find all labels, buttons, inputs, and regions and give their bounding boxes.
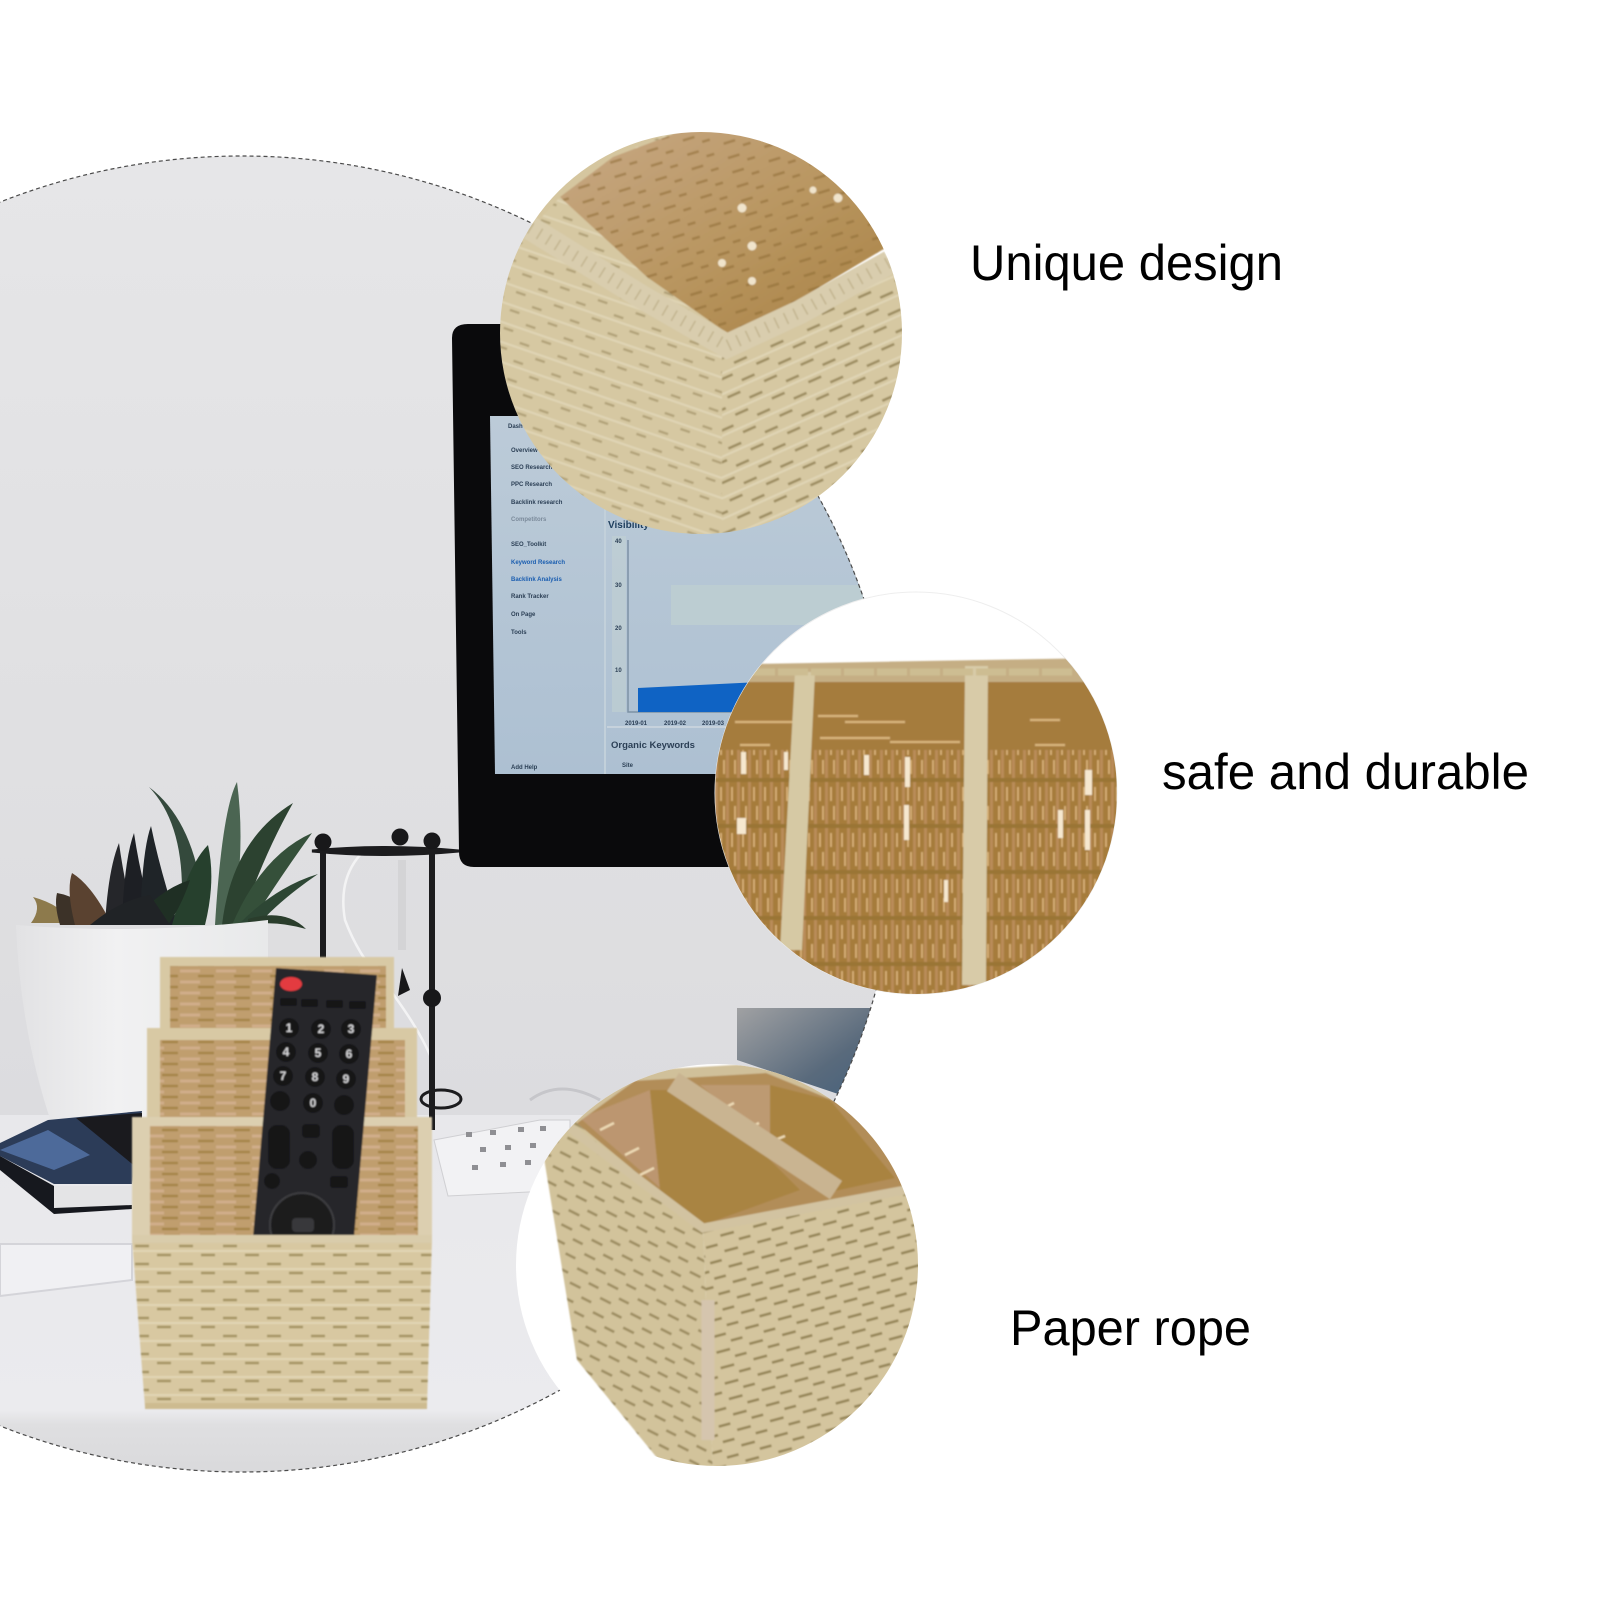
screen text: Keyword Research (511, 560, 565, 566)
paper sheets (0, 1244, 132, 1296)
white pot (34, 920, 268, 1115)
remote d-pad (270, 1193, 334, 1257)
remote control: 4 (283, 1045, 290, 1059)
front compartment (132, 1117, 432, 1241)
screen text: Backlink research (511, 500, 563, 506)
background wall (0, 150, 905, 1475)
infographic canvas (0, 132, 1527, 1473)
remote control: 2 (318, 1022, 325, 1036)
desk surface (0, 1115, 582, 1472)
blue chart area (638, 682, 748, 712)
remote control: 0 (310, 1096, 317, 1110)
screen text: Dash (508, 424, 523, 430)
panel: desk scene circle (0, 150, 905, 1475)
screen text: 30 (615, 583, 622, 589)
cable (530, 1089, 600, 1100)
screen text: PPC Research (511, 482, 552, 488)
back rim (538, 136, 662, 216)
screen text: Competitors (511, 517, 547, 523)
right divider (962, 666, 988, 985)
back rim and inner walls (573, 1068, 910, 1228)
screen text: Rank Tracker (511, 594, 549, 600)
white disc (715, 592, 1117, 994)
middle compartment (147, 1028, 417, 1120)
screen text: 10 (615, 668, 622, 674)
remote control (253, 968, 377, 1257)
main product: basket with remote (132, 957, 432, 1407)
remote control: 7 (280, 1069, 287, 1083)
remote control: 9 (343, 1072, 350, 1086)
screen text: Backlink Analysis (511, 577, 562, 583)
screen text: On Page (511, 612, 536, 618)
woven left face (500, 134, 724, 534)
screen text: Overview (511, 448, 538, 454)
screen text: SEO Research (511, 465, 553, 471)
label: unique design: Unique design (970, 235, 1283, 291)
monitor screen (490, 416, 905, 774)
screen text: 20 (615, 626, 622, 632)
book and pen (0, 1111, 142, 1214)
left woven face (543, 1120, 713, 1470)
keyboard (434, 1120, 570, 1196)
detail circle: safe and durable (715, 592, 1120, 1000)
rim band (748, 658, 1084, 683)
monitor screen: Organic Keywords (611, 740, 695, 751)
screen text: 2019-01 (625, 721, 648, 727)
plant (31, 782, 318, 929)
screen text: 40 (615, 539, 622, 545)
monitor (452, 324, 905, 867)
hourglass stand (312, 828, 461, 1130)
right woven face (703, 1186, 925, 1470)
basket interior (560, 132, 884, 333)
label: paper rope: Paper rope (1010, 1300, 1251, 1356)
screen text: Tools (511, 630, 527, 636)
woven right face (721, 258, 902, 533)
screen text: Add Help (511, 765, 538, 771)
dashed circle outline (0, 156, 900, 1472)
remote control: 8 (312, 1070, 319, 1084)
screen text: 2019-03 (702, 721, 725, 727)
screen text (508, 424, 725, 771)
remote control: 6 (346, 1047, 353, 1061)
rope rim (530, 228, 890, 346)
divider (673, 1082, 836, 1190)
screen text: SEO_Toolkit (511, 542, 546, 548)
label: safe and durable: safe and durable (1162, 744, 1529, 800)
remote control: 1 (286, 1021, 293, 1035)
monitor screen: Visibility (608, 520, 649, 531)
upper inner wall (715, 682, 1117, 752)
left divider (780, 672, 815, 950)
rope edges (570, 1128, 905, 1228)
back compartment (160, 957, 394, 1035)
monitor stand base (737, 1008, 870, 1094)
remote control: 3 (348, 1022, 355, 1036)
detail circle: unique design (500, 132, 902, 534)
front woven wall (132, 1239, 432, 1407)
lower inner wall (715, 750, 1117, 1000)
white disc (516, 1064, 918, 1466)
remote control: 5 (315, 1046, 322, 1060)
screen text: 2019-02 (664, 721, 687, 727)
detail circle: paper rope (516, 1064, 925, 1470)
screen text: Site (622, 763, 634, 769)
